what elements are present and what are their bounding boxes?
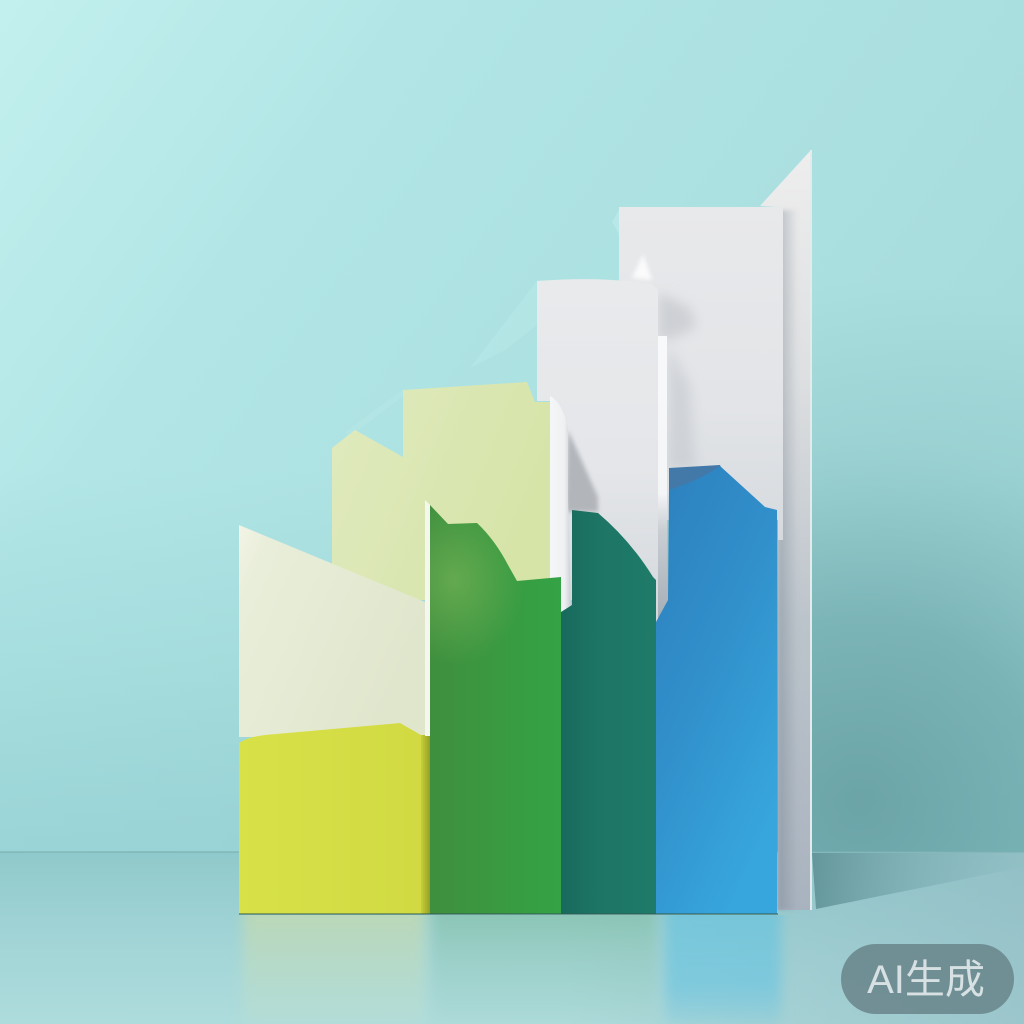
glassy edges behind bars (345, 208, 620, 436)
shadow on bar 3 above teal bar (566, 430, 598, 512)
floor shadow (812, 853, 1024, 909)
yellow bar (239, 723, 431, 914)
AI generated badge: AI生成 (867, 958, 985, 1002)
white bar 3 upper section (537, 279, 658, 622)
cream bar upper section (239, 525, 425, 737)
green bar (425, 500, 561, 914)
AI generated badge (841, 944, 1014, 1014)
tallest white back panel (760, 150, 812, 910)
teal bar (561, 510, 656, 914)
white bar 4 upper section (619, 207, 783, 540)
base line under bars (239, 913, 778, 915)
light strip beside bar 4 (658, 336, 667, 622)
floor (0, 851, 1024, 1024)
white flap on bar 3 (550, 396, 571, 612)
blue bar (656, 465, 777, 914)
floor reflections of bars (243, 905, 781, 1024)
pale green bar upper section (332, 382, 550, 600)
